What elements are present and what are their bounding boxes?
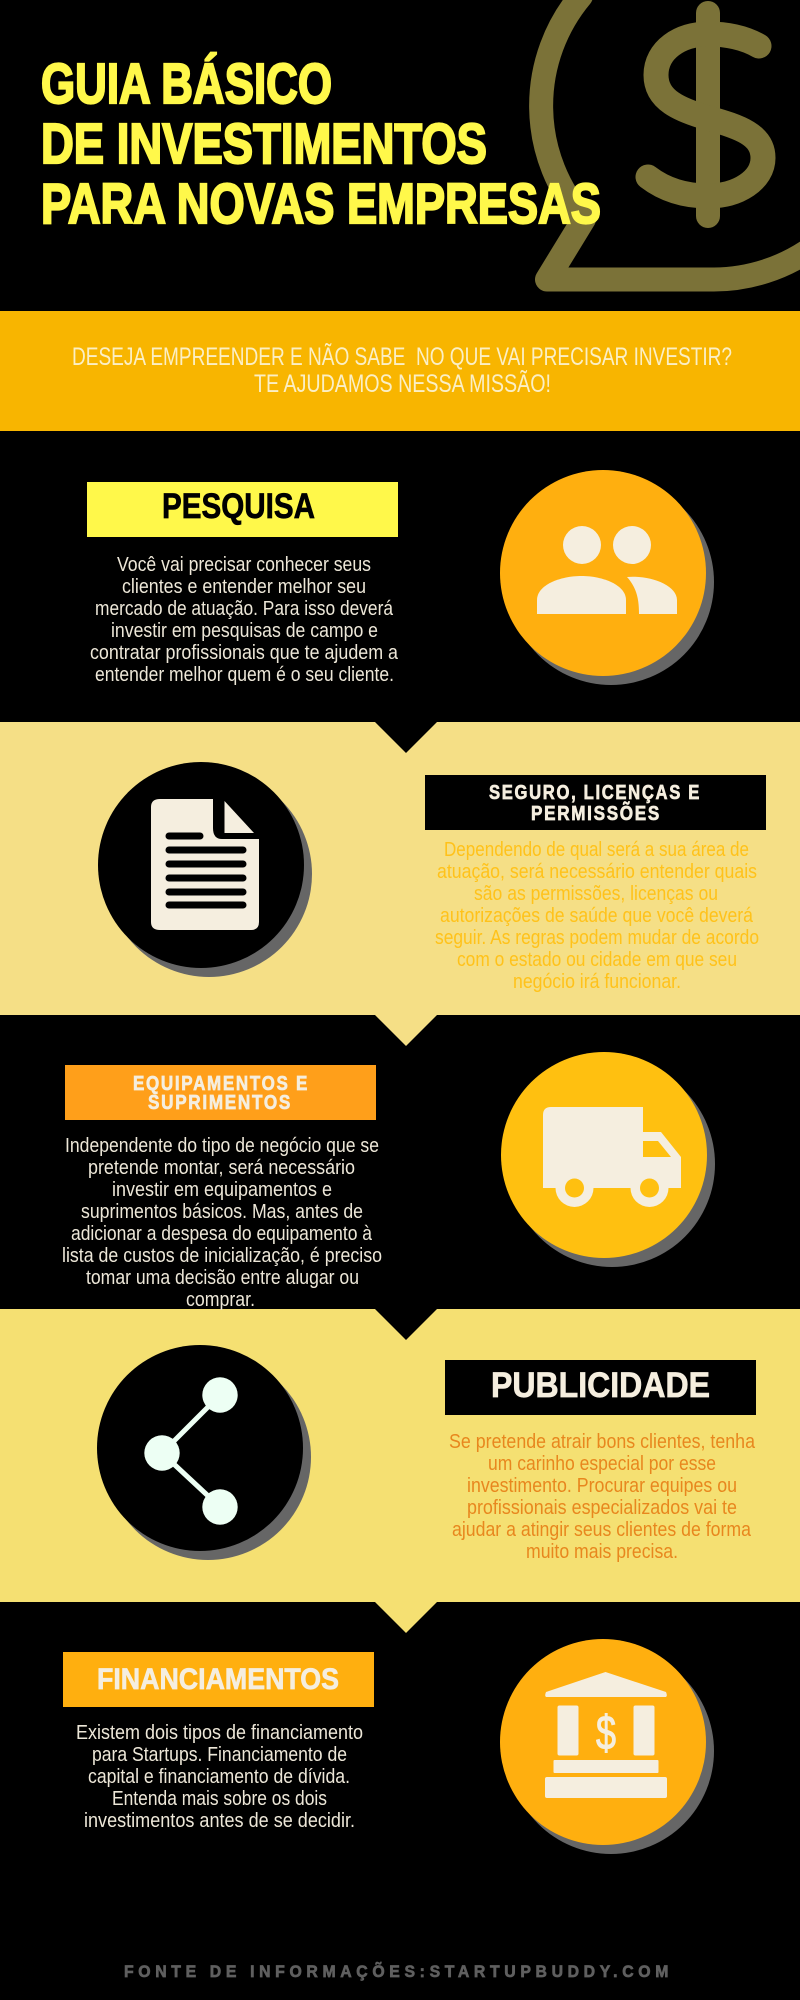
text: seguro: são as permissões, licenças ou: [474, 883, 718, 905]
text: equipamentos: [62, 1135, 382, 1311]
text: equipamentos: suprimentos básicos. Mas, antes de: [81, 1201, 363, 1223]
icon: document: [98, 762, 312, 977]
heading: pesquisa: PESQUISA: [162, 487, 315, 526]
heading: financiamentos: [63, 1652, 374, 1707]
text: pesquisa: contratar profissionais que te ajudem a: [90, 642, 399, 664]
icon: bank: [500, 1639, 714, 1854]
heading: seguro: [425, 775, 766, 830]
text: seguro: autorizações de saúde que você deverá: [440, 905, 754, 927]
text: equipamentos: adicionar a despesa do equipamento à: [71, 1223, 373, 1245]
icon: share: [97, 1345, 311, 1560]
section: pesquisa: [87, 470, 714, 686]
text: equipamentos: tomar uma decisão entre alugar ou: [86, 1267, 359, 1289]
text: financiamentos: Existem dois tipos de financiamento: [76, 1722, 363, 1744]
text: pesquisa: mercado de atuação. Para isso deverá: [95, 598, 394, 620]
text: seguro: negócio irá funcionar.: [513, 971, 681, 993]
title: GUIA BÁSICO: [41, 52, 332, 116]
title: DE INVESTIMENTOS: [41, 112, 487, 176]
banner text: [72, 342, 732, 398]
text: financiamentos: para Startups. Financiamento de: [92, 1744, 347, 1766]
text: seguro: atuação, será necessário entender quais: [437, 861, 757, 883]
text: publicidade: muito mais precisa.: [526, 1541, 678, 1563]
section: seguro: [98, 762, 766, 993]
text: pesquisa: [90, 554, 399, 686]
text: seguro: seguir. As regras podem mudar de acordo: [435, 927, 759, 949]
text: publicidade: um carinho especial por esse: [488, 1453, 716, 1475]
heading: seguro: PERMISSÕES: [531, 801, 661, 825]
text: financiamentos: Entenda mais sobre os dois: [112, 1788, 327, 1810]
icon: bank: $: [596, 1707, 616, 1760]
text: pesquisa: investir em pesquisas de campo e: [111, 620, 378, 642]
text: publicidade: [449, 1431, 756, 1563]
title: PARA NOVAS EMPRESAS: [41, 172, 601, 236]
text: pesquisa: entender melhor quem é o seu cliente.: [95, 664, 394, 686]
text: seguro: [435, 839, 759, 993]
panel: publicidade band: [0, 1309, 800, 1633]
heading: equipamentos: [65, 1065, 376, 1120]
text: publicidade: Se pretende atrair bons clientes, tenha: [449, 1431, 756, 1453]
intro banner: [0, 311, 800, 431]
text: equipamentos: lista de custos de inicialização, é preciso: [62, 1245, 382, 1267]
section: publicidade: [97, 1345, 756, 1563]
icon: people: [500, 470, 714, 685]
text: pesquisa: clientes e entender melhor seu: [122, 576, 366, 598]
section: equipamentos: [62, 1052, 715, 1311]
text: equipamentos: Independente do tipo de negócio que se: [65, 1135, 379, 1157]
text: pesquisa: Você vai precisar conhecer seus: [117, 554, 371, 576]
text: financiamentos: investimentos antes de se decidir.: [84, 1810, 355, 1832]
heading: pesquisa: [87, 482, 398, 537]
source footer: FONTE DE INFORMAÇÕES:STARTUPBUDDY.COM: [124, 1961, 673, 1981]
text: publicidade: investimento. Procurar equipes ou: [467, 1475, 737, 1497]
panel: seguro band: [0, 722, 800, 1046]
banner text: TE AJUDAMOS NESSA MISSÃO!: [254, 369, 551, 398]
heading: equipamentos: SUPRIMENTOS: [148, 1092, 292, 1114]
text: financiamentos: [76, 1722, 363, 1832]
heading: financiamentos: FINANCIAMENTOS: [97, 1663, 339, 1696]
text: seguro: Dependendo de qual será a sua área de: [444, 839, 749, 861]
heading: publicidade: PUBLICIDADE: [491, 1366, 710, 1405]
icon: truck: [501, 1052, 715, 1267]
section: financiamentos: [63, 1639, 714, 1854]
text: financiamentos: capital e financiamento de dívida.: [88, 1766, 350, 1788]
icon: speech bubble with dollar sign: [541, 0, 800, 280]
text: publicidade: ajudar a atingir seus clientes de forma: [452, 1519, 752, 1541]
text: publicidade: profissionais especializados vai te: [467, 1497, 737, 1519]
text: seguro: com o estado ou cidade em que seu: [457, 949, 737, 971]
text: equipamentos: pretende montar, será necessário: [88, 1157, 355, 1179]
title: [41, 52, 601, 236]
heading: seguro: SEGURO, LICENÇAS E: [489, 782, 701, 804]
heading: equipamentos: EQUIPAMENTOS E: [133, 1073, 309, 1095]
text: equipamentos: investir em equipamentos e: [112, 1179, 332, 1201]
heading: publicidade: [445, 1360, 756, 1415]
text: equipamentos: comprar.: [186, 1289, 255, 1311]
